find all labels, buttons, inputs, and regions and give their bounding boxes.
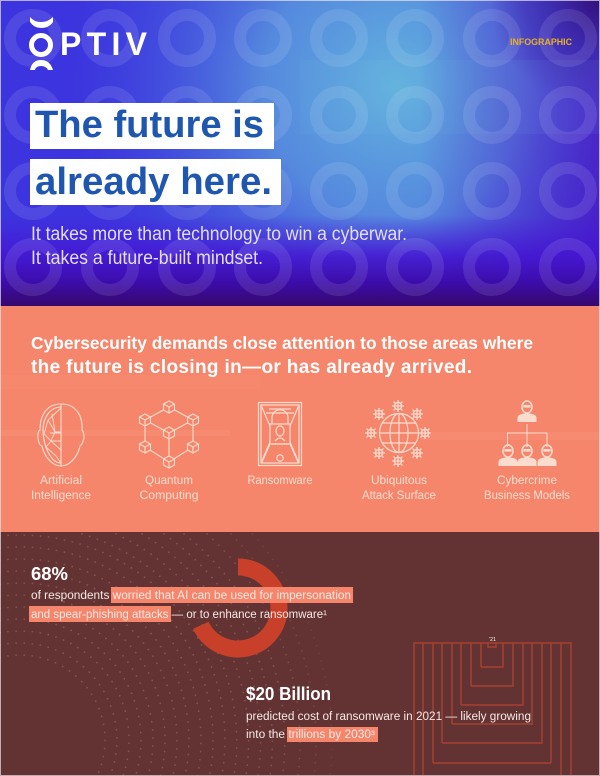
stat: 20 billion: [246, 684, 531, 742]
dotted contour pattern: [0, 534, 332, 776]
icon labels: Artificial: [40, 475, 82, 487]
icon labels: Attack Surface: [362, 490, 436, 502]
icon labels: Computing: [140, 490, 198, 502]
icon labels: Intelligence: [31, 490, 91, 502]
label: infographic tag: INFOGRAPHIC: [510, 37, 572, 47]
icon labels: Ransomware: [248, 475, 312, 487]
section heading: the future is closing in—or has already arrived.: [31, 357, 472, 378]
stat: 68 percent: of respondents worried that AI can be used for impersonation: [31, 590, 351, 602]
stat: 20 billion: into the trillions by 2030³: [246, 729, 375, 741]
stat: 20 billion: $20 Billion: [246, 684, 331, 704]
stat: 20 billion: predicted cost of ransomware in 2021 — likely growing: [246, 711, 531, 723]
icon labels: Quantum: [145, 475, 193, 487]
stat: 68 percent: [29, 564, 353, 622]
icon labels: Business Models: [484, 490, 570, 502]
icon: ransomware lock: [258, 402, 302, 466]
panel: coral focus areas background: [0, 306, 600, 532]
icon labels: Cybercrime: [497, 475, 557, 487]
subtitle: It takes more than technology to win a cyberwar.: [31, 224, 407, 245]
subtitle: [31, 224, 407, 269]
icon: cybercrime org chart: [498, 401, 556, 466]
stat: 68 percent: 68%: [31, 564, 68, 584]
ring pattern: [10, 15, 591, 290]
icon labels: Ubiquitous: [371, 475, 427, 487]
title: [30, 103, 281, 205]
panel: statistics background: [0, 532, 600, 776]
icon: artificial intelligence head: [38, 404, 84, 466]
logo: Optiv: PTIV: [60, 26, 148, 62]
subtitle: It takes a future-built mindset.: [31, 248, 263, 269]
icon: ubiquitous attack surface globe: [365, 400, 431, 467]
section heading: Cybersecurity demands close attention to those areas where: [31, 333, 533, 353]
chart: 68 percent donut: [201, 567, 279, 649]
title: The future is: [35, 104, 264, 146]
chart: nested growth squares: [414, 643, 571, 775]
icon labels: [31, 475, 570, 502]
chart label: 2021: '21: [489, 637, 496, 643]
stat: 68 percent: and spear-phishing attacks — or to enhance ransomware¹: [31, 609, 327, 621]
panel: hero background: [0, 0, 600, 306]
logo: Optiv: [30, 17, 148, 70]
title: already here.: [35, 161, 272, 203]
section heading: [31, 333, 533, 378]
icon: quantum computing cube: [140, 401, 198, 468]
